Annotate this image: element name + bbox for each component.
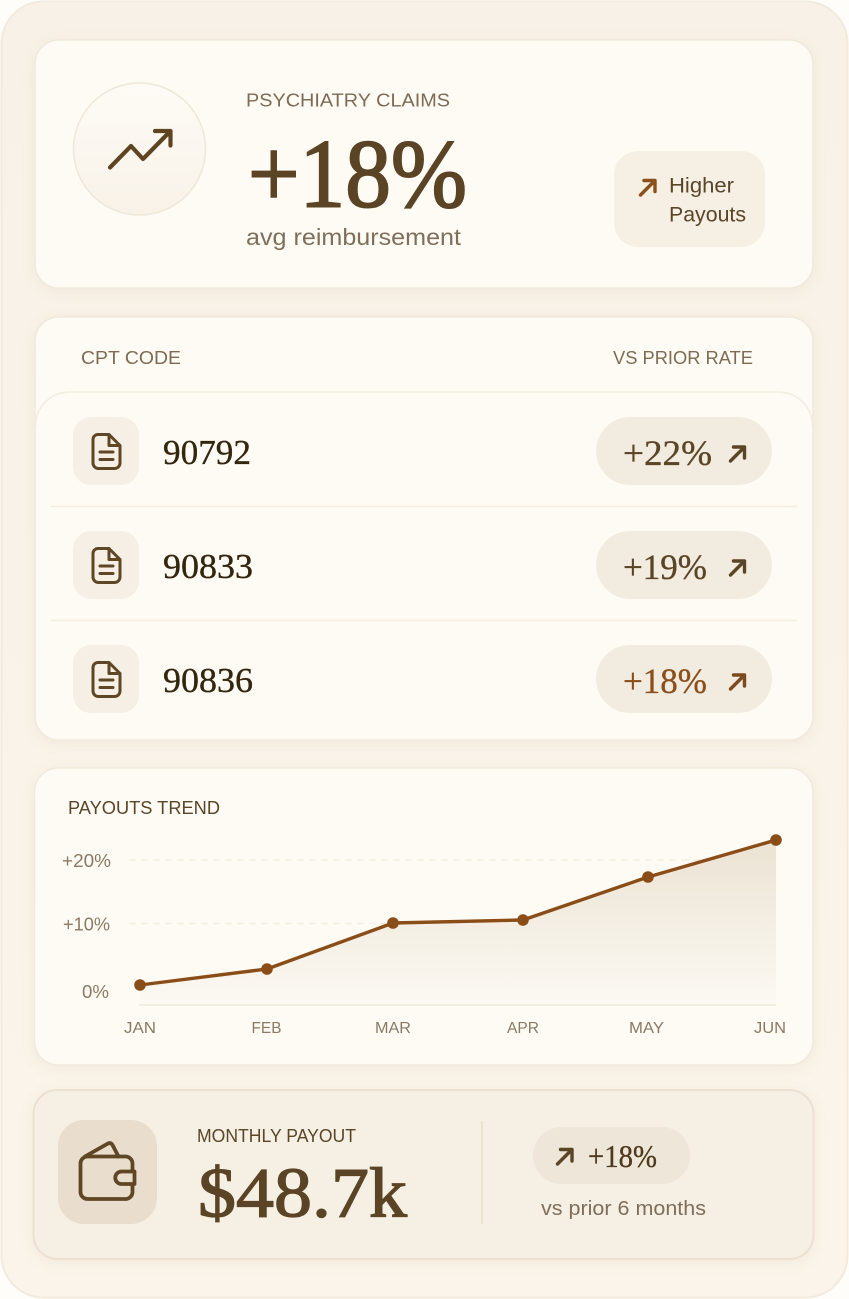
icon: wallet	[58, 1120, 157, 1224]
icon: document	[73, 417, 139, 485]
pill: +18%	[596, 645, 772, 713]
row: 90836: 90836	[163, 661, 253, 700]
row: 90836	[73, 645, 772, 713]
row: 90792	[73, 417, 772, 485]
x axis labels: MAR	[375, 1020, 411, 1037]
caption: avg reimbursement: avg reimbursement	[246, 224, 462, 250]
panel: psychiatry claims headline	[35, 40, 813, 288]
pill: +18%: +18%	[623, 661, 707, 701]
label: monthly payout: MONTHLY PAYOUT	[197, 1126, 356, 1146]
table header: CPT code: CPT CODE	[81, 348, 181, 368]
y axis labels: 0%	[82, 981, 109, 1002]
pill: +19%	[596, 531, 772, 599]
badge: higher payouts: Higher	[669, 174, 734, 198]
caption: vs prior 6 months: vs prior 6 months	[541, 1198, 706, 1220]
chart title: PAYOUTS TREND	[68, 798, 220, 818]
panel: CPT code table	[35, 317, 813, 740]
y axis labels	[62, 850, 111, 1002]
y axis labels: +10%	[63, 914, 110, 934]
pill: +18%	[533, 1127, 690, 1184]
x axis labels: FEB	[252, 1020, 282, 1037]
badge: higher payouts	[614, 151, 765, 247]
pill: +19%: +19%	[623, 547, 707, 587]
x axis labels: APR	[507, 1020, 539, 1037]
label: psychiatry claims: PSYCHIATRY CLAIMS	[246, 90, 450, 110]
y axis labels: +20%	[62, 850, 111, 871]
headline value: +18%	[248, 120, 467, 228]
x axis labels	[124, 1020, 786, 1037]
value: $48.7k: $48.7k	[198, 1154, 408, 1232]
x axis labels: JUN	[754, 1020, 786, 1037]
panel: payouts trend	[34, 768, 813, 1065]
pill: +22%: +22%	[623, 433, 712, 473]
table header: vs prior rate: VS PRIOR RATE	[613, 348, 753, 368]
row: 90833: 90833	[163, 547, 253, 586]
pill: +18%: +18%	[588, 1138, 657, 1174]
icon: trending up	[74, 83, 206, 215]
line chart	[62, 834, 786, 1037]
x axis labels: MAY	[629, 1020, 664, 1037]
pill: +22%	[596, 417, 772, 485]
badge: higher payouts: Payouts	[669, 204, 746, 226]
panel: monthly payout	[34, 1090, 814, 1259]
row: 90792: 90792	[163, 433, 251, 472]
x axis labels: JAN	[124, 1020, 156, 1037]
row: 90833	[73, 531, 772, 599]
icon: document	[73, 645, 139, 713]
icon: document	[73, 531, 139, 599]
